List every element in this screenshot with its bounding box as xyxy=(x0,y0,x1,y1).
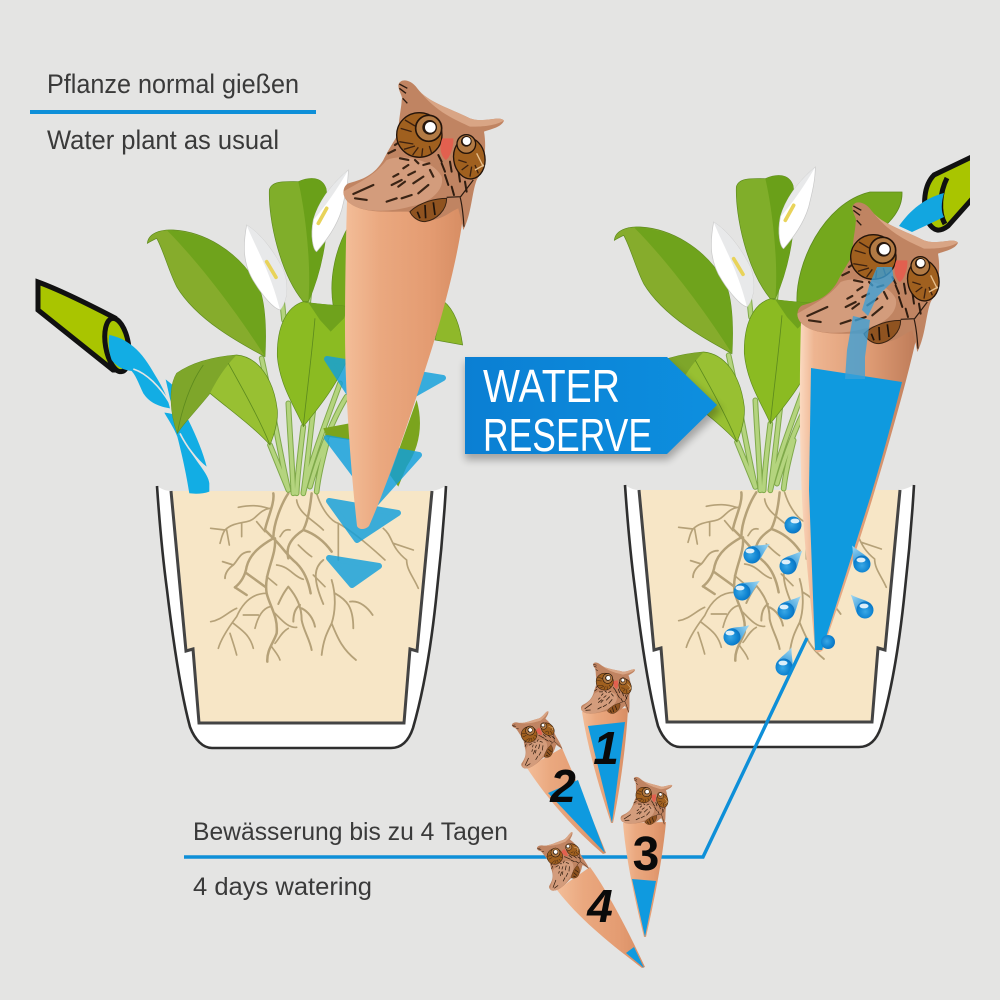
banner arrow xyxy=(465,357,717,454)
small owl spikes showing water level over days xyxy=(497,655,678,968)
spike 1: full xyxy=(572,655,644,823)
heading rule xyxy=(30,110,316,114)
plant leaves and flowers xyxy=(614,167,815,490)
spike 4: nearly empty xyxy=(522,822,645,968)
banner text line 2: RESERVE xyxy=(483,409,652,461)
owl head xyxy=(343,80,504,230)
pointer line from cone to caption xyxy=(184,638,807,857)
english caption: 4 days watering xyxy=(193,873,372,901)
plant leaves and flowers xyxy=(147,170,463,493)
banner shadow xyxy=(465,362,722,460)
water from hose xyxy=(899,193,944,232)
spike 3: one third xyxy=(615,771,678,937)
spike 4: nearly empty: 4 xyxy=(586,880,613,932)
pot xyxy=(625,485,914,747)
english heading text: Water plant as usual xyxy=(47,125,279,155)
banner: water reserve arrow xyxy=(465,357,722,461)
german heading text: Pflanze normal gießen xyxy=(47,69,299,99)
heading: water plant as usual xyxy=(30,69,316,155)
terracotta cone xyxy=(345,200,464,529)
pot xyxy=(157,486,446,748)
hose xyxy=(922,155,970,233)
banner text line 1: WATER xyxy=(483,360,620,412)
panel: left pot with normal watering xyxy=(38,80,504,748)
big leaf behind owl xyxy=(797,192,902,310)
owl head xyxy=(797,202,958,352)
hose xyxy=(38,282,133,374)
spike 2: three quarters xyxy=(497,701,606,854)
water drops xyxy=(720,516,877,678)
caption: 4 days watering xyxy=(193,818,508,901)
german caption: Bewässerung bis zu 4 Tagen xyxy=(193,818,508,846)
spike 1: full: 1 xyxy=(593,722,619,774)
water level triangles xyxy=(327,359,443,585)
cone water fill xyxy=(809,368,902,650)
roots xyxy=(211,493,418,662)
spike 3: one third: 3 xyxy=(633,828,659,881)
water stream from hose xyxy=(109,335,209,494)
terracotta cone xyxy=(800,320,918,652)
roots xyxy=(679,492,886,661)
spike 2: three quarters: 2 xyxy=(549,760,576,812)
panel: right pot with water reserve xyxy=(614,153,980,747)
translucent water drip xyxy=(845,267,894,379)
